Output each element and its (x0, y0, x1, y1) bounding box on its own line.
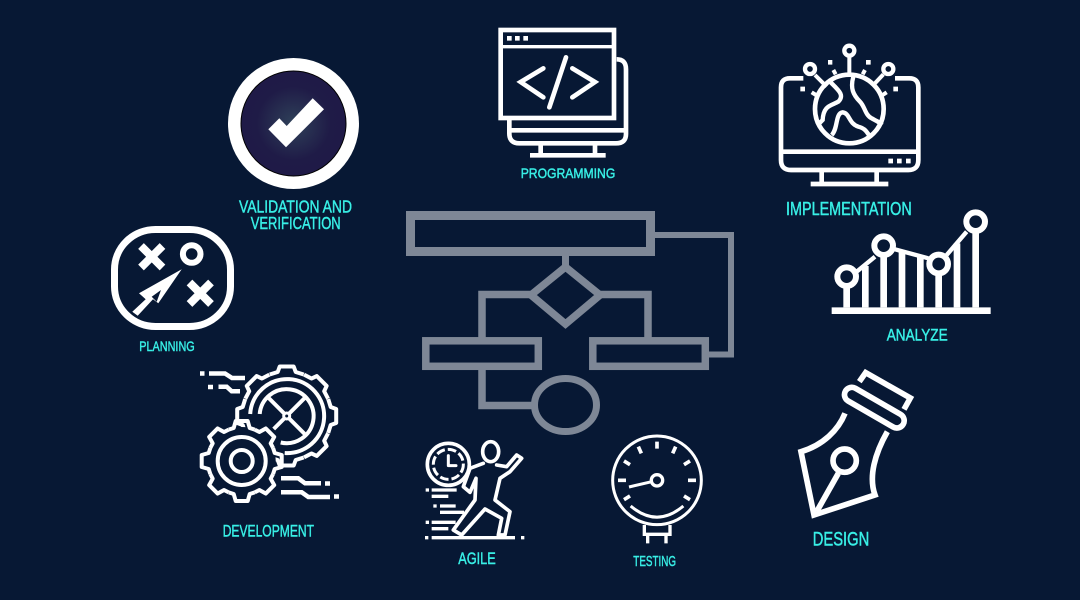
icon: globe on monitor (781, 46, 918, 184)
icon: tactics board (114, 230, 230, 326)
icon: gears (200, 366, 339, 501)
programming (501, 30, 626, 181)
icon: code window on monitor (501, 30, 626, 155)
validation and verification (228, 58, 359, 233)
motion lines (200, 374, 339, 497)
planning (114, 230, 230, 354)
icon: line and bar chart (832, 212, 991, 311)
icon: running figure with clock (425, 442, 524, 538)
label: validation and verification: VALIDATION AND (239, 197, 352, 217)
flowchart (410, 216, 731, 432)
analyze (832, 212, 991, 345)
large gear outline (237, 366, 336, 466)
flowchart: right process box (593, 341, 705, 366)
icon: check mark badge (228, 58, 359, 189)
label: validation and verification: VERIFICATION (251, 213, 341, 233)
development (200, 366, 339, 541)
flowchart: top process box (410, 216, 650, 252)
icon: pressure gauge (613, 436, 701, 543)
flowchart: feedback connector (655, 235, 731, 354)
design (801, 373, 910, 550)
label: agile: AGILE (458, 550, 496, 568)
label: development: DEVELOPMENT (223, 523, 314, 541)
label: testing: TESTING (633, 554, 676, 570)
flowchart: terminal ellipse (534, 378, 596, 432)
small gear outline (202, 421, 282, 501)
label: analyze: ANALYZE (887, 327, 948, 345)
label: validation and verification (239, 197, 352, 233)
label: programming: PROGRAMMING (521, 165, 615, 181)
testing (613, 436, 701, 570)
flowchart: stem connector (562, 256, 569, 266)
agile (425, 442, 524, 568)
implementation (781, 46, 918, 219)
label: planning: PLANNING (139, 338, 195, 354)
flowchart: branch connectors (482, 294, 648, 338)
icon: fountain pen nib (801, 373, 910, 515)
label: implementation: IMPLEMENTATION (786, 199, 912, 219)
flowchart: decision diamond (531, 267, 600, 324)
flowchart: left process box (426, 341, 538, 366)
flowchart: terminal connector (482, 370, 533, 406)
label: design: DESIGN (813, 528, 869, 550)
